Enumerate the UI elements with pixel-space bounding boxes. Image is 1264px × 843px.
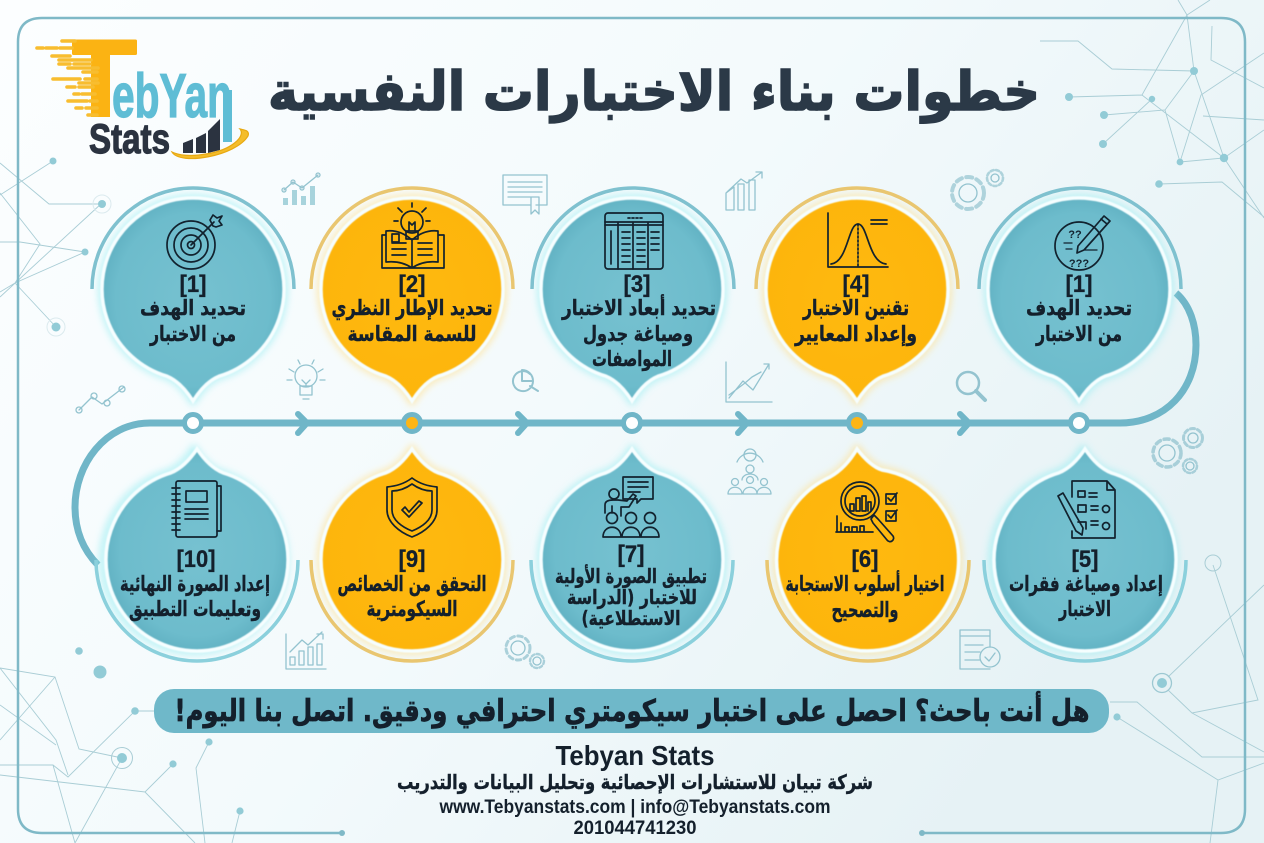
label line 2: للسمة المقاسة [348,322,476,346]
number: [4] [842,271,870,298]
number: [9] [398,546,426,573]
footer contact block [397,740,873,839]
number: [1] [1066,271,1092,298]
step bubble: top 3 table [532,188,734,401]
number: [2] [398,271,426,298]
call to action banner [154,689,1109,733]
icon: question circle and pen: ?? [1068,229,1082,241]
step bubble: bottom 7 pilot [531,449,733,661]
company description: شركة تبيان للاستشارات الإحصائية وتحليل البيانات والتدريب [397,770,873,794]
logo: Tebyan Stats [37,40,248,162]
label line 2: الاختبار [1058,597,1111,621]
decorative icons [76,170,1202,669]
icon: presenter and audience [603,477,659,537]
label: تحديد الهدف [140,296,246,320]
logo: Tebyan Stats: Stats [89,115,170,162]
number: [6] [852,546,878,573]
step bubble: top 5 objective [979,188,1181,401]
label line 3: المواصفات [592,347,672,371]
label line 2: من الاختبار [1035,322,1122,346]
step bubble: top 2 theory [311,188,513,401]
icon: target [167,215,222,269]
label: تحديد أبعاد الاختبار [561,293,716,320]
phone: 201044741230 [574,818,696,839]
step bubble: top 4 normal curve [756,188,958,401]
number: [7] [618,541,644,568]
label: تطبيق الصورة الأولية [555,563,707,588]
step bubble: bottom 5 writing items [984,449,1186,661]
number: [1] [180,271,206,298]
label line 2: والتصحيح [832,598,898,622]
step bubble: bottom 9 psychometrics [311,449,513,661]
step bubble: top 1 target [92,188,294,401]
icon: question circle and pen: ??? [1069,258,1089,270]
web and email: www.Tebyanstats.com | info@Tebyanstats.com [439,796,830,818]
label line 2: السيكومترية [366,597,458,621]
icon: notebook [172,481,221,537]
icon: bell curve [828,213,888,267]
company name: Tebyan Stats [556,740,714,771]
icon: form and pen [1058,481,1115,538]
label line 2: من الاختبار [149,322,236,346]
number: [10] [176,546,216,573]
step bubble: bottom 6 response format [767,449,969,661]
icon: question circle and pen [1055,216,1110,270]
title: خطوات بناء الاختبارات النفسية [268,60,1040,123]
label: إعداد الصورة النهائية [120,572,270,596]
label: اختيار أسلوب الاستجابة [786,569,944,596]
label: تقنين الاختبار [802,296,909,320]
label line 2: وصياغة جدول [583,322,693,346]
step bubble: bottom 10 final form [96,449,298,661]
label: التحقق من الخصائص [338,572,486,596]
label line 2: وإعداد المعايير [794,322,917,346]
icon: magnifier and checklist [836,482,897,542]
icon: book and bulb [382,203,444,268]
number: [3] [624,271,650,298]
timeline path [75,293,1196,565]
number: [5] [1072,546,1098,573]
label line 3: الاستطلاعية) [582,607,680,630]
label: إعداد وصياغة فقرات [1009,572,1163,596]
icon: table [605,213,663,269]
label: تحديد الإطار النظري [332,296,492,321]
label line 2: للاختبار (الدراسة [567,586,697,609]
icon: shield check [387,478,437,537]
logo: Tebyan Stats: ebYan [112,62,232,131]
label line 2: وتعليمات التطبيق [129,597,261,621]
label: تحديد الهدف [1026,296,1132,320]
